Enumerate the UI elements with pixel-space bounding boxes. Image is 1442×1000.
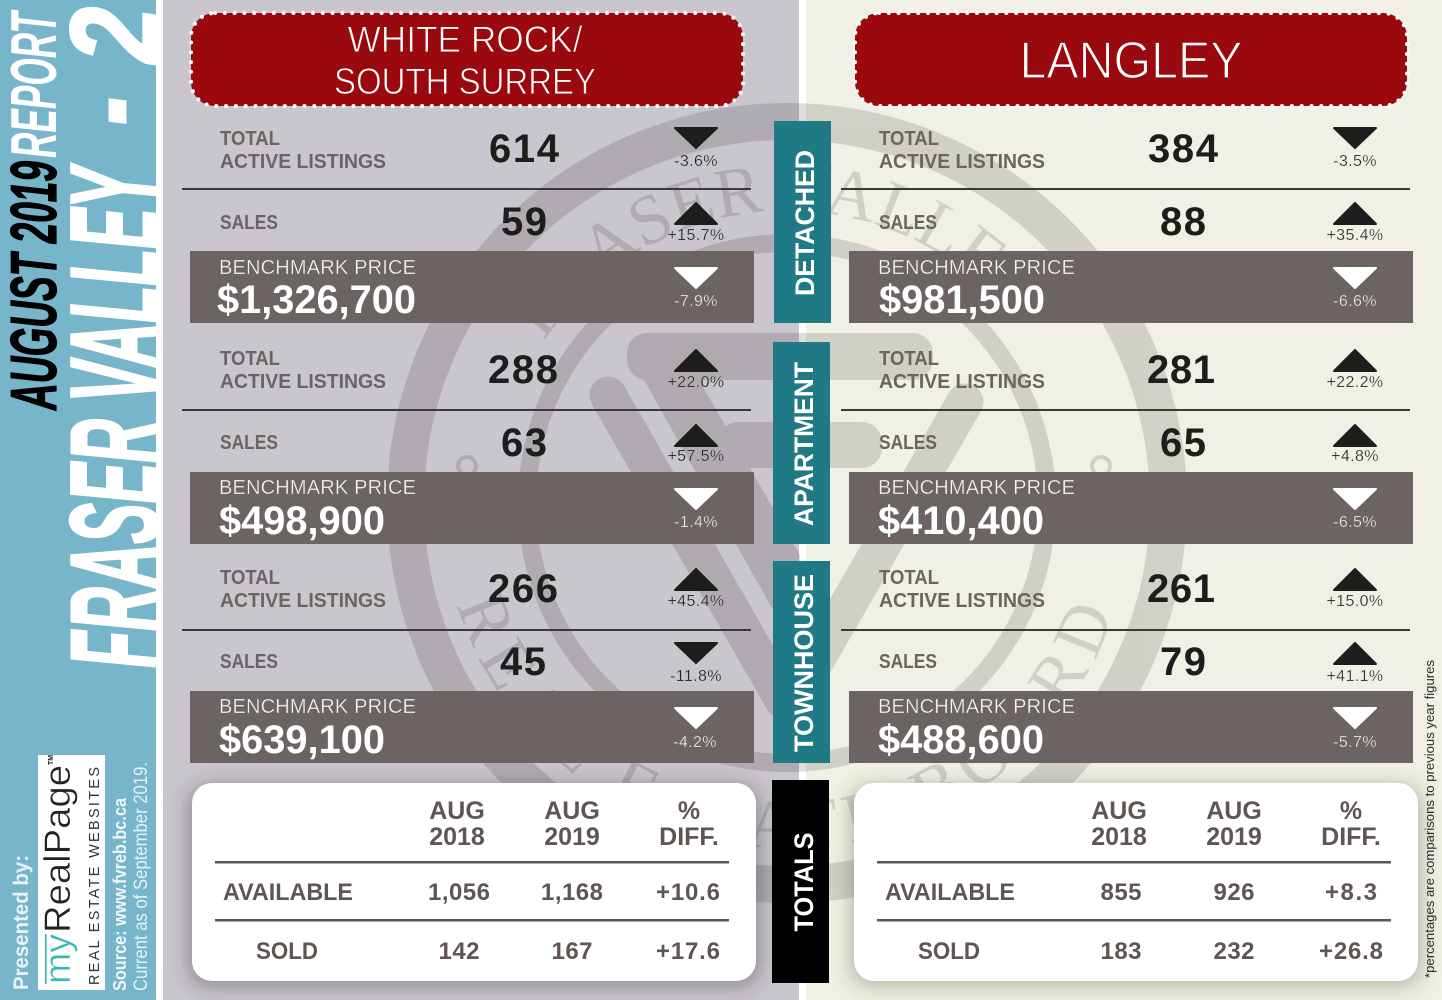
benchmark price [190, 691, 754, 763]
sales: SALES [879, 432, 937, 454]
category tab: apartment [773, 342, 830, 544]
panel: White Rock apartment: +22.0% [667, 374, 725, 391]
panel: Langley townhouse: -5.7% [1333, 734, 1377, 751]
panel: White Rock townhouse: BENCHMARK PRICE [219, 696, 416, 718]
watermark: real estate board seal [388, 103, 1186, 903]
panel: Langley detached: $981,500 [879, 278, 1045, 322]
logo: myRealPage: REAL ESTATE WEBSITES [87, 767, 103, 985]
table: White Rock totals: 2019 [544, 823, 600, 851]
table: Langley totals: DIFF. [1321, 823, 1381, 851]
category tab: townhouse [773, 561, 830, 763]
table: White Rock totals: AUG [429, 797, 485, 825]
panel: Langley apartment: BENCHMARK PRICE [878, 477, 1075, 499]
table: Langley totals: +8.3 [1325, 879, 1377, 906]
table: White Rock totals: AVAILABLE [223, 879, 353, 906]
source credit [110, 762, 152, 991]
panel: White Rock townhouse: 266 [488, 567, 558, 611]
header: Langley: LANGLEY [1020, 32, 1242, 90]
panel: White Rock apartment: 63 [501, 421, 547, 465]
benchmark price [190, 251, 754, 323]
table: Langley totals: 232 [1214, 938, 1254, 965]
sales: SALES [220, 212, 278, 234]
panel: White Rock detached: 614 [489, 127, 560, 171]
panel: Langley townhouse: ACTIVE LISTINGS [879, 590, 1045, 612]
table: Langley totals [850, 783, 1422, 987]
watermark: real estate board seal: FRASER VALLEY [534, 167, 1006, 338]
footnote: *percentages are comparisons to previous year figures [1422, 660, 1437, 978]
heading: dash: - [38, 97, 177, 125]
table: White Rock totals [188, 783, 760, 987]
panel: Langley townhouse: 79 [1160, 640, 1206, 684]
panel: Langley townhouse: +15.0% [1326, 593, 1384, 610]
panel: White Rock apartment: ACTIVE LISTINGS [220, 371, 386, 393]
header: White Rock / South Surrey [191, 13, 743, 106]
panel: Langley apartment: +4.8% [1331, 448, 1379, 465]
logo: myRealPage [37, 755, 105, 990]
panel: White Rock detached: -7.9% [674, 293, 718, 310]
total active listings: TOTAL [879, 128, 939, 150]
table: White Rock totals: +17.6 [656, 938, 720, 965]
panel: Langley detached [841, 127, 1413, 323]
panel: Langley detached: -6.6% [1333, 293, 1377, 310]
panel: Langley detached: ACTIVE LISTINGS [879, 151, 1045, 173]
category tab: townhouse: TOWNHOUSE [789, 574, 819, 752]
panel: White Rock townhouse: -4.2% [673, 734, 717, 751]
header: White Rock / South Surrey: SOUTH SURREY [334, 61, 596, 102]
category tab: apartment: APARTMENT [789, 362, 819, 526]
header: Langley [855, 13, 1407, 106]
panel: Langley townhouse: $488,600 [878, 718, 1044, 762]
table: White Rock totals: AUG [544, 797, 600, 825]
panel: White Rock townhouse: $639,100 [219, 718, 385, 762]
panel: White Rock detached: $1,326,700 [217, 278, 416, 322]
logo: myRealPage: my [37, 934, 78, 984]
source credit: Source: www.fvreb.bc.ca [110, 797, 130, 991]
table: Langley totals: +26.8 [1319, 938, 1383, 965]
table: White Rock totals: 1,056 [428, 879, 490, 906]
panel: Langley apartment: $410,400 [878, 499, 1044, 543]
panel: Langley apartment: +22.2% [1326, 374, 1384, 391]
total active listings: TOTAL [220, 567, 280, 589]
panel: White Rock apartment: 288 [488, 348, 558, 392]
table: Langley totals: 2018 [1091, 823, 1147, 851]
sales: SALES [879, 212, 937, 234]
panel: Langley detached: 88 [1160, 200, 1206, 244]
panel: Langley detached: 384 [1148, 127, 1219, 171]
panel: White Rock detached: BENCHMARK PRICE [219, 257, 416, 279]
total active listings: TOTAL [220, 348, 280, 370]
category tab: totals: TOTALS [789, 832, 819, 932]
panel: Langley townhouse: BENCHMARK PRICE [878, 696, 1075, 718]
category tab: detached: DETACHED [790, 150, 820, 296]
table: White Rock totals: DIFF. [659, 823, 719, 851]
panel: White Rock detached: 59 [501, 200, 547, 244]
table: Langley totals: 2019 [1206, 823, 1262, 851]
panel: Langley townhouse [841, 567, 1413, 763]
panel: White Rock apartment: BENCHMARK PRICE [219, 477, 416, 499]
table: Langley totals: AVAILABLE [885, 879, 1015, 906]
header: White Rock / South Surrey: WHITE ROCK/ [348, 19, 583, 60]
panel: Langley apartment: 65 [1160, 421, 1206, 465]
panel: Langley townhouse: 261 [1147, 567, 1215, 611]
panel: White Rock apartment: +57.5% [667, 448, 725, 465]
table: White Rock totals: 2018 [429, 823, 485, 851]
panel: White Rock detached: ACTIVE LISTINGS [220, 151, 386, 173]
panel: Langley detached: -3.5% [1333, 153, 1377, 170]
panel: Langley apartment: 281 [1147, 348, 1215, 392]
logo: myRealPage: RealPage [37, 765, 78, 933]
panel: White Rock detached: -3.6% [674, 153, 718, 170]
table: Langley totals: SOLD [918, 938, 980, 965]
sales: SALES [220, 432, 278, 454]
table: Langley totals: % [1340, 797, 1362, 825]
table: Langley totals: 926 [1214, 879, 1254, 906]
panel: White Rock apartment: -1.4% [674, 514, 718, 531]
category tab: detached [774, 121, 831, 323]
table: Langley totals: AUG [1206, 797, 1262, 825]
panel: White Rock townhouse: -11.8% [670, 668, 722, 685]
benchmark price [190, 472, 754, 544]
table: White Rock totals: 142 [438, 938, 480, 965]
sales: SALES [879, 651, 937, 673]
table: White Rock totals: SOLD [256, 938, 318, 965]
panel: Langley townhouse: +41.1% [1326, 668, 1384, 685]
presented by text: Presented by: [10, 855, 33, 990]
panel: Langley apartment: -6.5% [1333, 514, 1377, 531]
panel: White Rock detached [182, 127, 754, 323]
benchmark price [849, 251, 1413, 323]
table: White Rock totals: +10.6 [656, 879, 720, 906]
sales: SALES [220, 651, 278, 673]
total active listings: TOTAL [220, 128, 280, 150]
table: White Rock totals: % [678, 797, 700, 825]
sidebar title [10, 6, 156, 668]
total active listings: TOTAL [879, 567, 939, 589]
panel: Langley apartment: ACTIVE LISTINGS [879, 371, 1045, 393]
table: White Rock totals: 1,168 [541, 879, 603, 906]
logo: myRealPage: TM [48, 755, 55, 765]
panel: Langley detached: +35.4% [1326, 227, 1384, 244]
panel: White Rock townhouse [182, 567, 754, 763]
panel: White Rock townhouse: +45.4% [667, 593, 725, 610]
panel: White Rock apartment: $498,900 [219, 499, 385, 543]
panel: White Rock apartment [182, 348, 754, 544]
table: White Rock totals: 167 [552, 938, 592, 965]
table: Langley totals: AUG [1091, 797, 1147, 825]
table: Langley totals: 855 [1100, 879, 1142, 906]
panel: Langley detached: BENCHMARK PRICE [878, 257, 1075, 279]
panel: White Rock townhouse: 45 [500, 640, 546, 684]
watermark: real estate board seal: REAL ESTATE BOARD [457, 592, 1107, 848]
panel: Langley apartment [841, 348, 1413, 544]
source credit: Current as of September 2019. [131, 762, 152, 991]
benchmark price [849, 691, 1413, 763]
panel: White Rock townhouse: ACTIVE LISTINGS [220, 590, 386, 612]
total active listings: TOTAL [879, 348, 939, 370]
panel: White Rock detached: +15.7% [667, 227, 725, 244]
table: Langley totals: 183 [1100, 938, 1142, 965]
category tab: totals [772, 780, 829, 983]
benchmark price [849, 472, 1413, 544]
